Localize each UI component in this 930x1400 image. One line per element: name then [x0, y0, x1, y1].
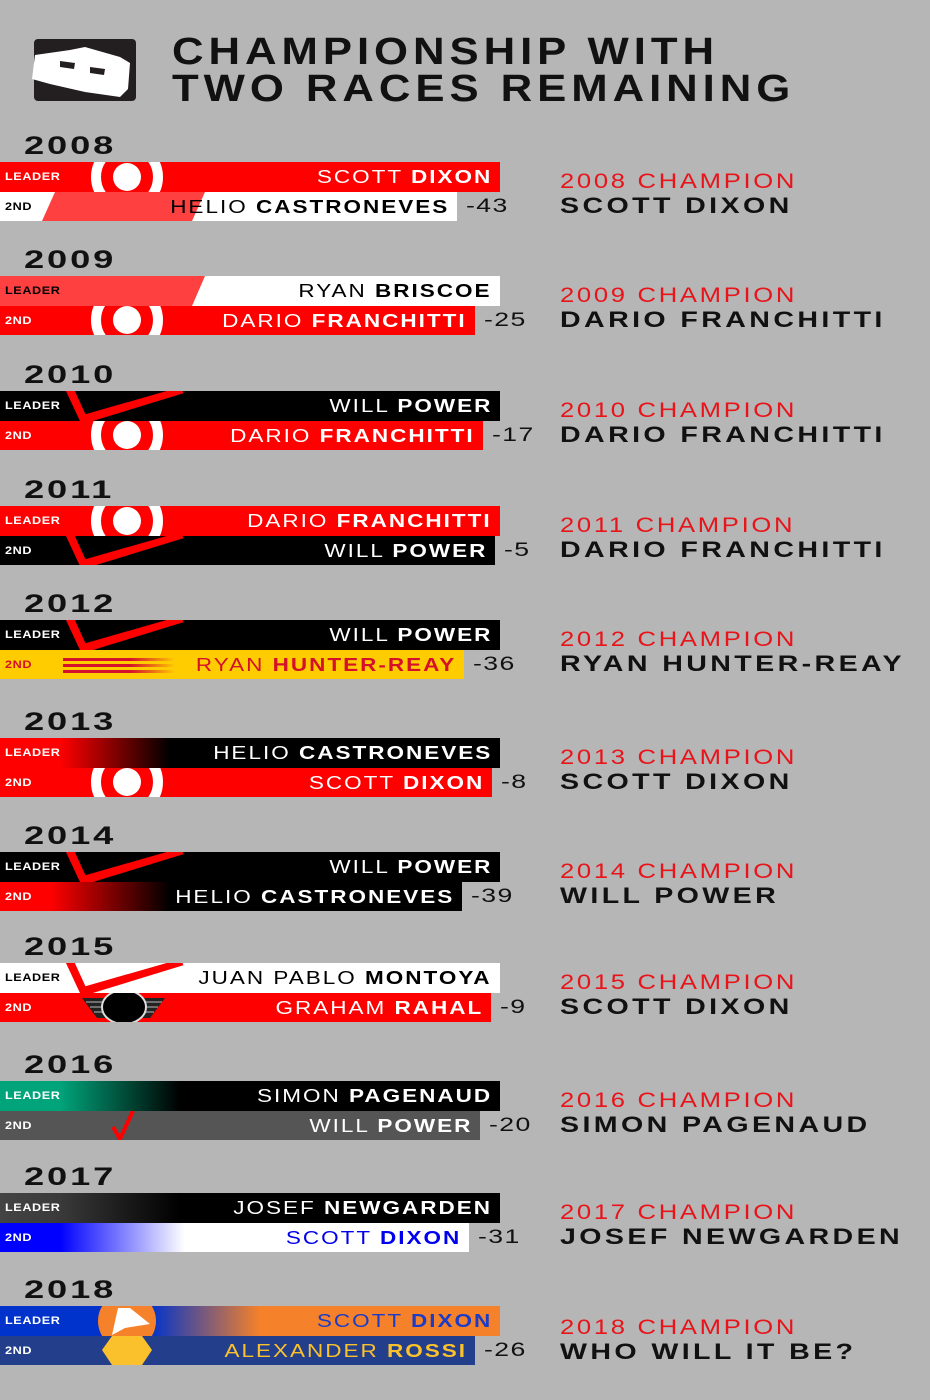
section 2015 — [0, 933, 797, 1022]
section 2011: DARIO FRANCHITTI — [248, 511, 492, 531]
section 2010: -17 — [492, 425, 535, 446]
section 2009: DARIO FRANCHITTI — [560, 307, 886, 332]
section 2008: 2ND — [5, 201, 32, 213]
section 2011: -5 — [504, 540, 530, 561]
section 2013: 2013 — [24, 708, 116, 736]
section 2016: 2ND — [5, 1120, 32, 1132]
section 2012: LEADER — [5, 629, 60, 641]
section 2014: 2ND — [5, 891, 32, 903]
section 2011: LEADER — [5, 515, 60, 527]
section 2010: LEADER — [5, 400, 60, 412]
section 2012: RYAN HUNTER-REAY — [196, 655, 456, 675]
section 2009: 2009 CHAMPION — [560, 284, 797, 307]
logo: indycar — [32, 39, 136, 101]
section 2017: -31 — [478, 1227, 521, 1248]
section 2011: 2ND — [5, 545, 32, 557]
section 2015: GRAHAM RAHAL — [275, 998, 483, 1018]
section 2018: 2ND — [5, 1345, 32, 1357]
title: CHAMPIONSHIP WITH — [172, 31, 719, 73]
section 2014: WILL POWER — [560, 883, 779, 908]
section 2012: RYAN HUNTER-REAY — [560, 651, 905, 676]
section 2016: SIMON PAGENAUD — [560, 1112, 871, 1137]
section 2011: DARIO FRANCHITTI — [560, 537, 886, 562]
section 2010: 2ND — [5, 430, 32, 442]
section 2009: 2ND — [5, 315, 32, 327]
section 2014: 2014 CHAMPION — [560, 860, 797, 883]
section 2015: JUAN PABLO MONTOYA — [199, 968, 492, 988]
section 2009: DARIO FRANCHITTI — [223, 311, 467, 331]
section 2011: 2011 CHAMPION — [560, 514, 795, 537]
section 2015: -9 — [500, 997, 526, 1018]
section 2015: 2ND — [5, 1002, 32, 1014]
section 2018: 2018 — [24, 1276, 116, 1304]
section 2013 — [0, 708, 797, 797]
section 2018: ALEXANDER ROSSI — [224, 1341, 467, 1361]
section 2008: SCOTT DIXON — [560, 193, 793, 218]
section 2018: LEADER — [5, 1315, 60, 1327]
section 2008: HELIO CASTRONEVES — [170, 197, 449, 217]
section 2016: LEADER — [5, 1090, 60, 1102]
section 2012 — [0, 590, 905, 679]
section 2018: WHO WILL IT BE? — [560, 1339, 856, 1364]
title: TWO RACES REMAINING — [172, 68, 795, 110]
section 2018: 2018 CHAMPION — [560, 1316, 797, 1339]
section 2013: HELIO CASTRONEVES — [213, 743, 492, 763]
section 2008: SCOTT DIXON — [317, 167, 492, 187]
section 2016: -20 — [489, 1115, 532, 1136]
section 2012: 2012 — [24, 590, 116, 618]
section 2017: SCOTT DIXON — [286, 1228, 461, 1248]
section 2016: 2016 — [24, 1051, 116, 1079]
section 2015: SCOTT DIXON — [560, 994, 793, 1019]
section 2017: LEADER — [5, 1202, 60, 1214]
section 2012: 2ND — [5, 659, 32, 671]
section 2017: 2ND — [5, 1232, 32, 1244]
section 2013: 2013 CHAMPION — [560, 746, 797, 769]
section 2010: DARIO FRANCHITTI — [560, 422, 886, 447]
section 2011 — [0, 476, 886, 565]
section 2012: 2012 CHAMPION — [560, 628, 797, 651]
section 2012: WILL POWER — [329, 625, 492, 645]
section 2017: 2017 CHAMPION — [560, 1201, 797, 1224]
section 2010: WILL POWER — [329, 396, 492, 416]
section 2012: -36 — [473, 654, 516, 675]
section 2014: LEADER — [5, 861, 60, 873]
section 2011: 2011 — [24, 476, 114, 504]
section 2017 — [0, 1163, 903, 1252]
section 2010: 2010 CHAMPION — [560, 399, 797, 422]
section 2011: WILL POWER — [324, 541, 487, 561]
section 2013: SCOTT DIXON — [309, 773, 484, 793]
section 2018 — [0, 1276, 856, 1365]
section 2014: 2014 — [24, 822, 116, 850]
section 2009 — [0, 246, 886, 335]
section 2008: 2008 CHAMPION — [560, 170, 797, 193]
section 2010: 2010 — [24, 361, 116, 389]
section 2013: -8 — [501, 772, 527, 793]
section 2018: SCOTT DIXON — [317, 1311, 492, 1331]
section 2008: -43 — [466, 196, 509, 217]
section 2015: 2015 — [24, 933, 116, 961]
section 2016 — [0, 1051, 871, 1140]
section 2014: HELIO CASTRONEVES — [175, 887, 454, 907]
section 2013: LEADER — [5, 747, 60, 759]
section 2013: 2ND — [5, 777, 32, 789]
section 2008 — [0, 132, 797, 221]
section 2017: 2017 — [24, 1163, 116, 1191]
section 2010: DARIO FRANCHITTI — [231, 426, 475, 446]
section 2015: 2015 CHAMPION — [560, 971, 797, 994]
section 2017: JOSEF NEWGARDEN — [233, 1198, 492, 1218]
section 2013: SCOTT DIXON — [560, 769, 793, 794]
section 2016: 2016 CHAMPION — [560, 1089, 797, 1112]
section 2014 — [0, 822, 797, 911]
section 2015: LEADER — [5, 972, 60, 984]
section 2008: 2008 — [24, 132, 116, 160]
section 2017: JOSEF NEWGARDEN — [560, 1224, 903, 1249]
section 2009: -25 — [484, 310, 527, 331]
section 2009: RYAN BRISCOE — [299, 281, 492, 301]
section 2009: 2009 — [24, 246, 116, 274]
section 2008: LEADER — [5, 171, 60, 183]
section 2009: LEADER — [5, 285, 60, 297]
section 2014: -39 — [471, 886, 514, 907]
section 2010 — [0, 361, 886, 450]
title — [172, 31, 795, 110]
section 2014: WILL POWER — [329, 857, 492, 877]
section 2016: SIMON PAGENAUD — [257, 1086, 492, 1106]
section 2018: -26 — [484, 1340, 527, 1361]
section 2016: WILL POWER — [309, 1116, 472, 1136]
